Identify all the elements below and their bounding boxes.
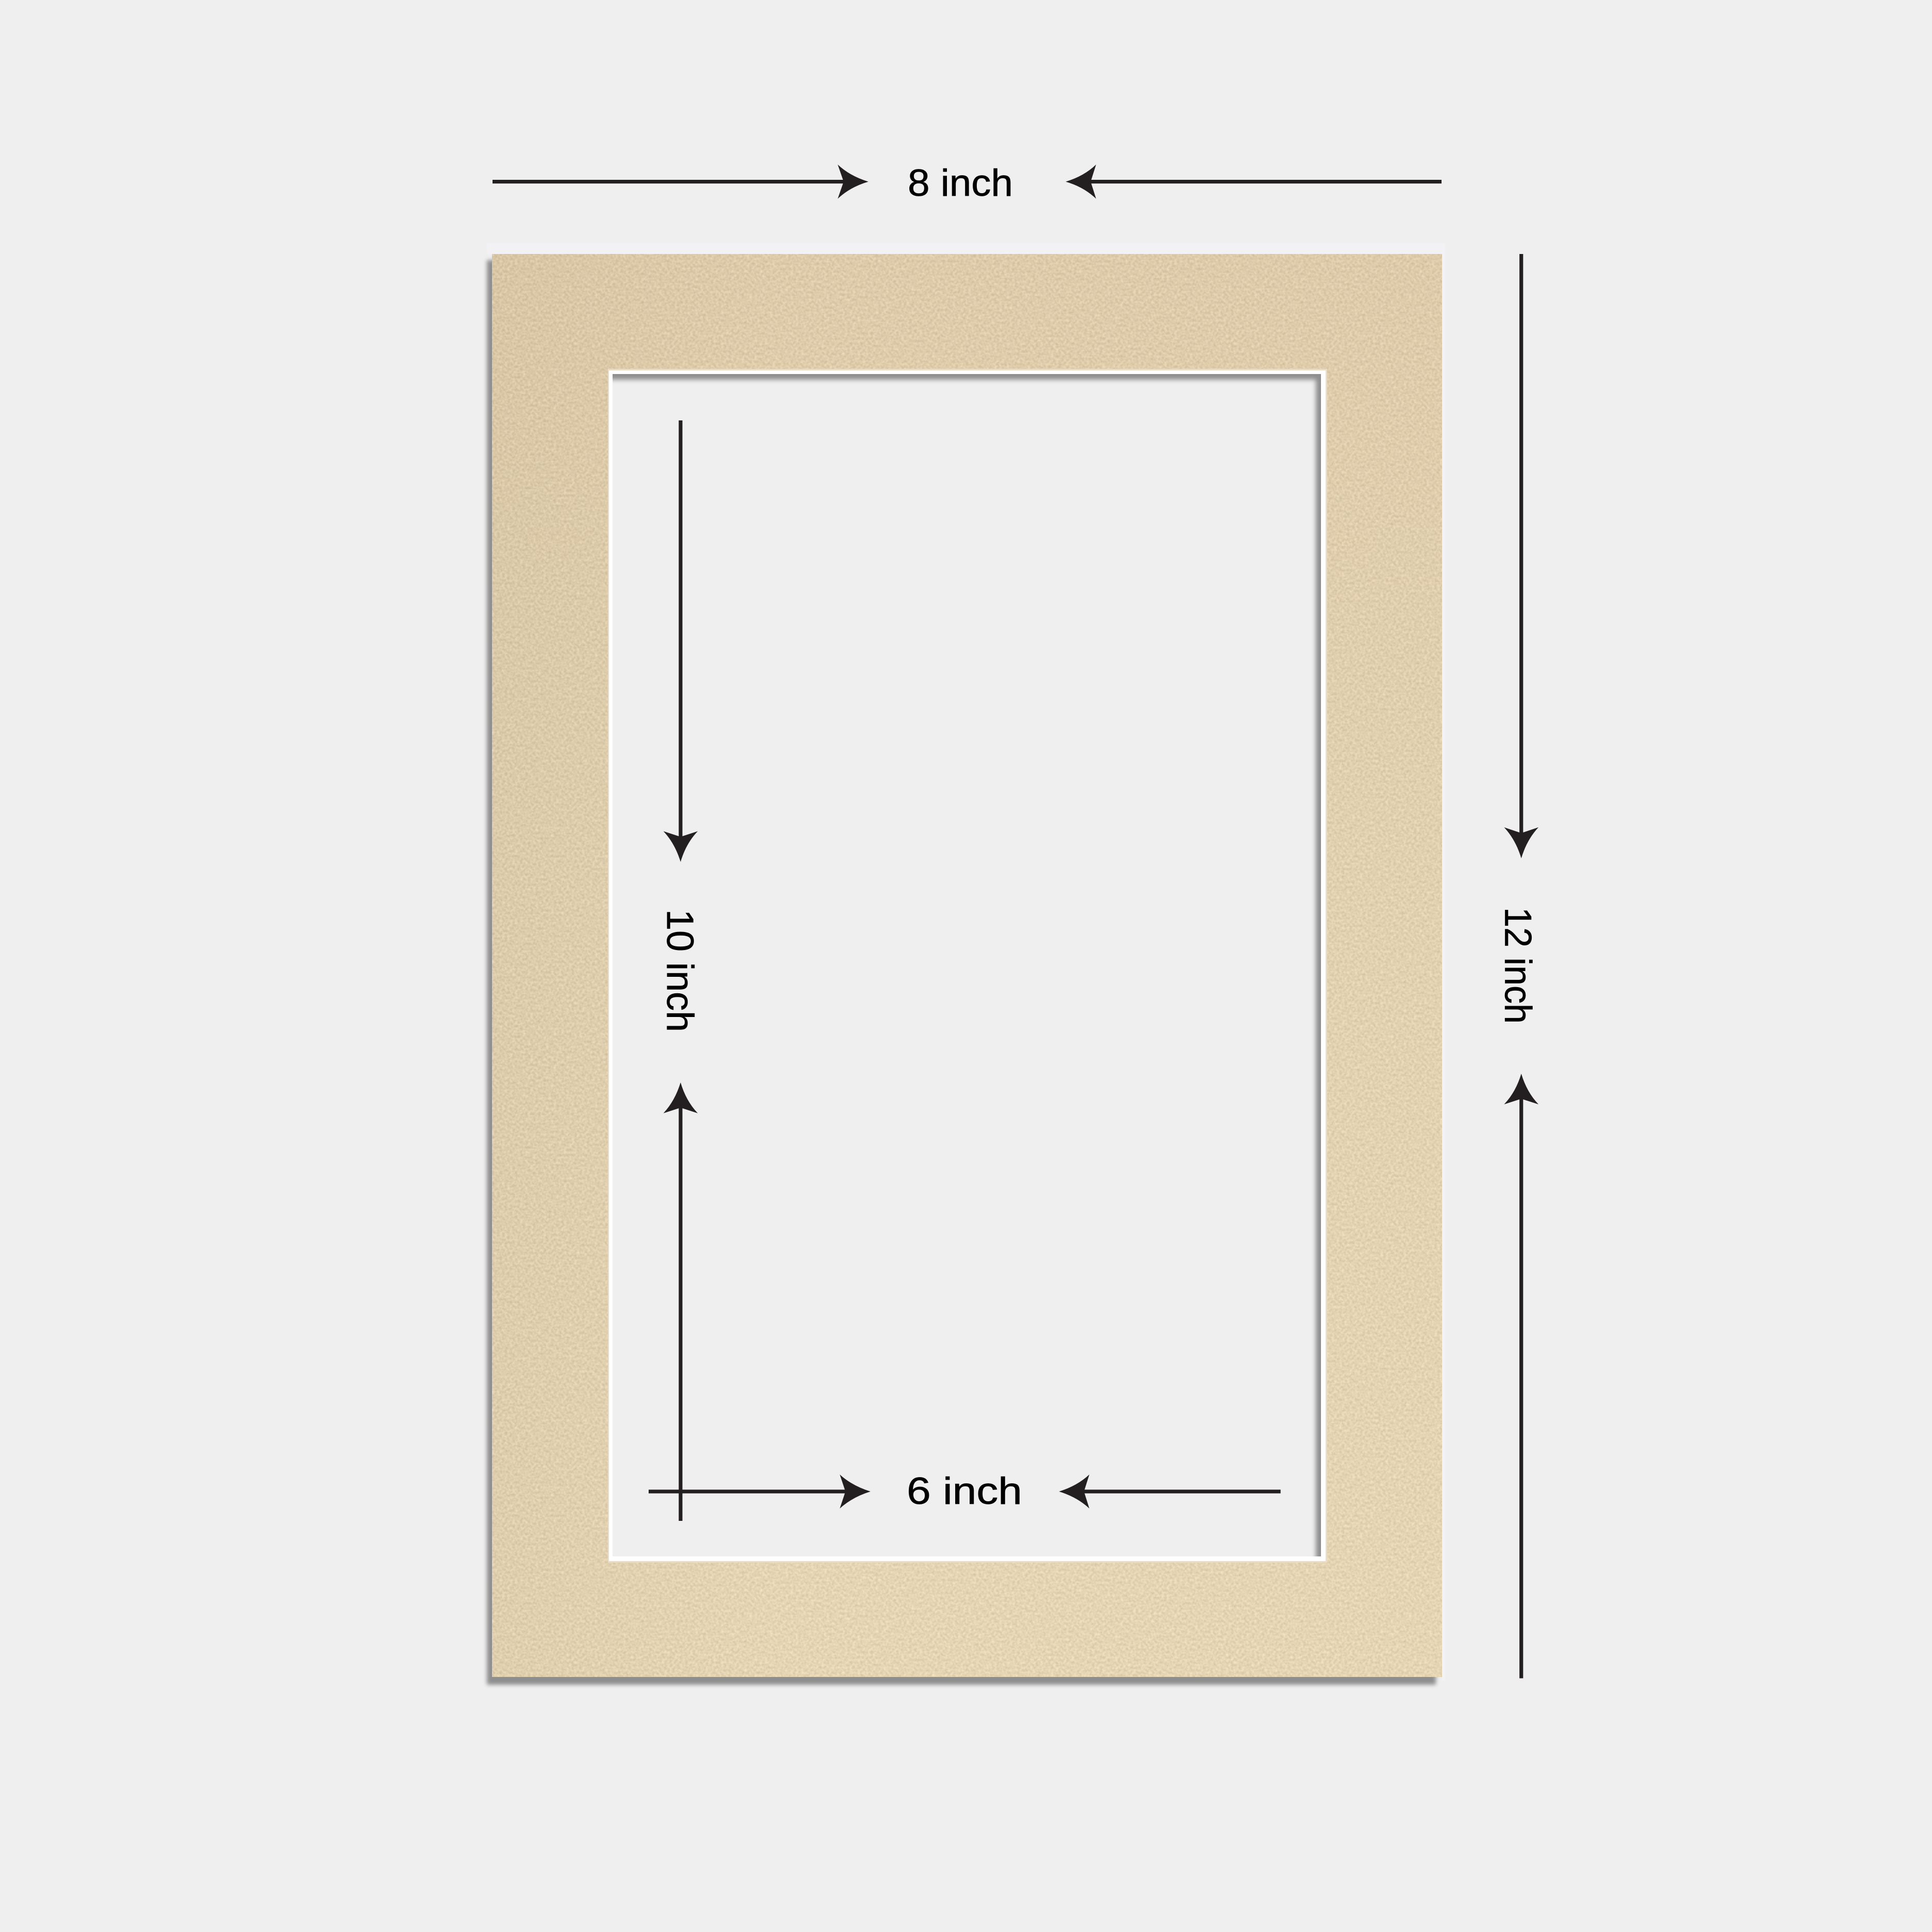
label: 6 inch: 6 inch bbox=[907, 1470, 1022, 1512]
arrow: opening width right bbox=[1059, 1475, 1281, 1509]
label: 10 inch: 10 inch bbox=[659, 909, 701, 1032]
label: 12 inch: 12 inch bbox=[1497, 907, 1538, 1024]
arrow: opening height up bbox=[664, 1082, 698, 1521]
opening interior bbox=[613, 374, 1321, 1556]
arrow: right dimension down bbox=[1504, 254, 1538, 858]
arrow: opening width left bbox=[649, 1475, 871, 1509]
white bevel edge bbox=[609, 370, 1326, 1561]
mat drop shadow bbox=[487, 260, 1436, 1685]
label: 8 inch: 8 inch bbox=[908, 162, 1013, 204]
arrow: top dimension right bbox=[1065, 164, 1442, 199]
opening bevel lip bbox=[608, 369, 1327, 1563]
arrow: right dimension up bbox=[1504, 1074, 1538, 1679]
arrow: top dimension left bbox=[493, 164, 869, 199]
mat surface bbox=[492, 254, 1442, 1677]
panel: mat board bbox=[487, 243, 1445, 1685]
arrow: opening height down bbox=[664, 420, 698, 862]
mat top and right halo bbox=[487, 243, 1445, 1681]
inner shadow of opening bbox=[613, 374, 1321, 1556]
